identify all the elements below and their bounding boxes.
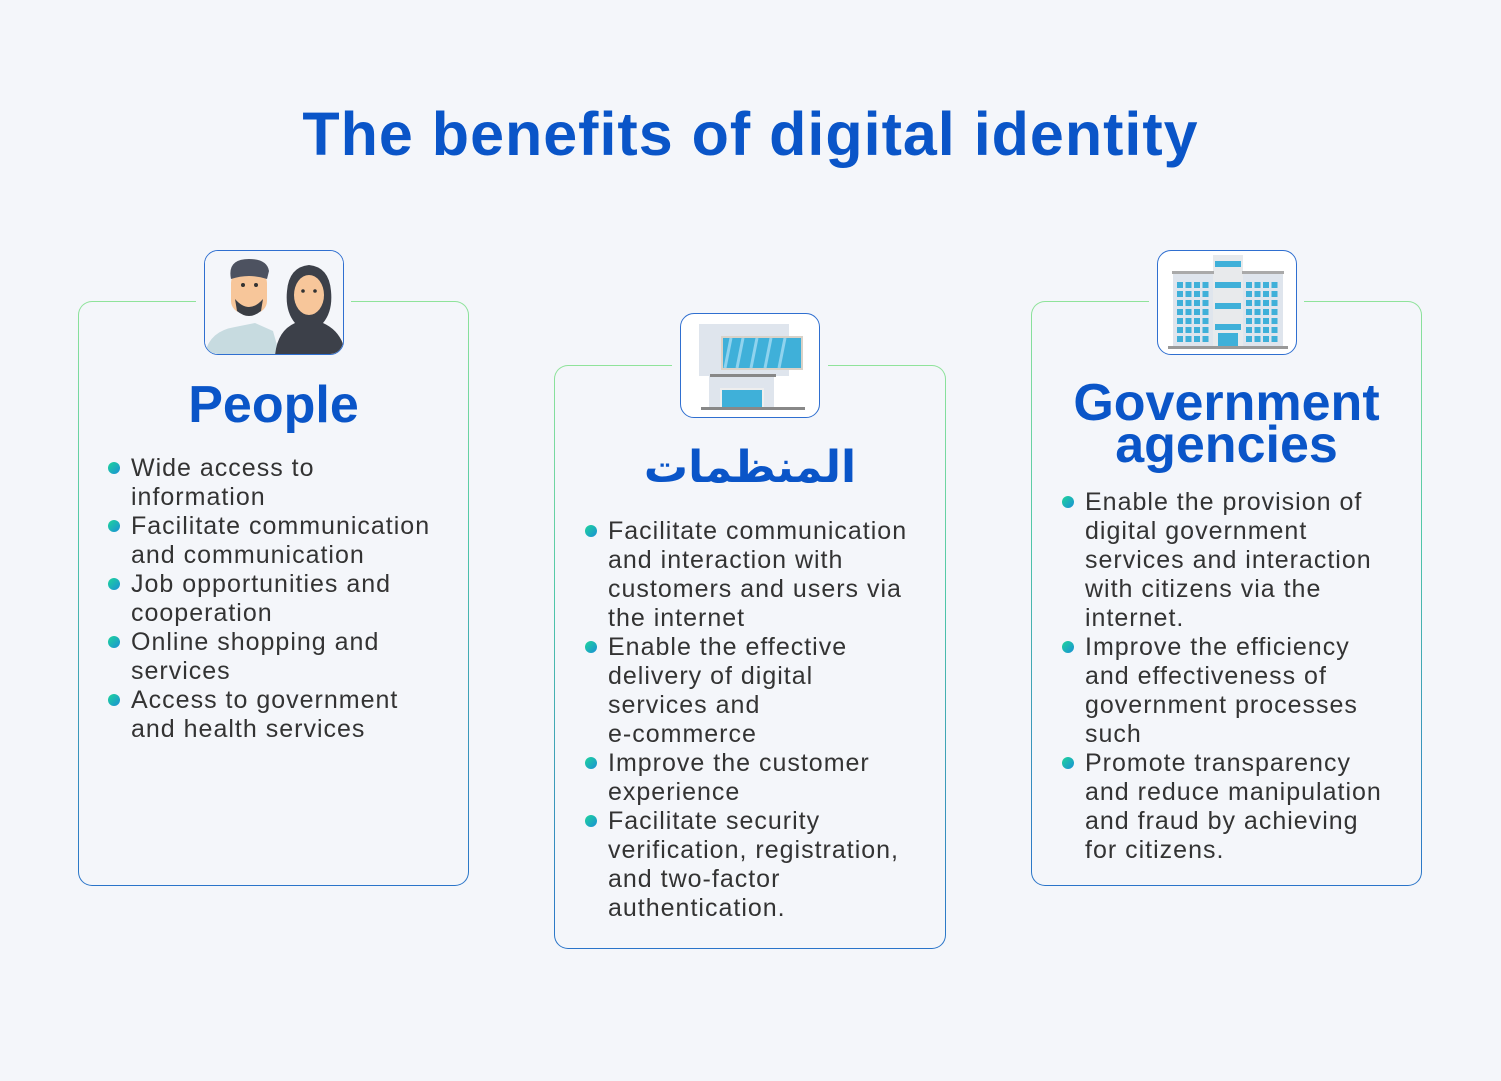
list: organizations: services and — [608, 691, 760, 719]
list: people: and communication — [131, 541, 365, 569]
list: organizations: e-commerce — [608, 720, 757, 748]
list: organizations: Facilitate communication — [608, 517, 907, 545]
list: organizations: Enable the effective — [608, 633, 847, 661]
list: organizations: the internet — [608, 604, 745, 632]
heading: People: People — [188, 376, 359, 434]
list: government: and fraud by achieving — [1085, 807, 1359, 835]
list: people: information — [131, 483, 266, 511]
list: organizations: authentication. — [608, 894, 786, 922]
list: organizations: verification, registration, — [608, 836, 899, 864]
heading: Government agencies — [1073, 374, 1380, 474]
list: people: and health services — [131, 715, 365, 743]
list: people: services — [131, 657, 231, 685]
panel: organizations — [554, 365, 946, 949]
list: people — [108, 454, 430, 743]
list: government: internet. — [1085, 604, 1184, 632]
list: government: services and interaction — [1085, 546, 1372, 574]
list: organizations: Improve the customer — [608, 749, 870, 777]
list: organizations: and interaction with — [608, 546, 843, 574]
list: government — [1062, 488, 1382, 864]
list: government: such — [1085, 720, 1142, 748]
list: government: Enable the provision of — [1085, 488, 1362, 516]
list: people: Wide access to — [131, 454, 315, 482]
list: government: Promote transparency — [1085, 749, 1351, 777]
list: people: Online shopping and — [131, 628, 379, 656]
list: people: Job opportunities and — [131, 570, 391, 598]
panel: government — [1031, 301, 1422, 886]
list: government: Improve the efficiency — [1085, 633, 1350, 661]
list: government: and reduce manipulation — [1085, 778, 1382, 806]
icon: government building — [1157, 250, 1297, 355]
list: government: and effectiveness of — [1085, 662, 1327, 690]
icon: store building — [680, 313, 820, 418]
list: organizations: and two-factor — [608, 865, 780, 893]
title: The benefits of digital identity — [302, 100, 1199, 168]
list: people: Access to government — [131, 686, 398, 714]
list: government: for citizens. — [1085, 836, 1224, 864]
panel: people — [78, 301, 469, 886]
list: organizations: Facilitate security — [608, 807, 820, 835]
list: government: digital government — [1085, 517, 1307, 545]
list: government: with citizens via the — [1085, 575, 1321, 603]
list: people: Facilitate communication — [131, 512, 430, 540]
list: people: cooperation — [131, 599, 273, 627]
list: government: government processes — [1085, 691, 1358, 719]
list: organizations: customers and users via — [608, 575, 902, 603]
heading: Government agencies: agencies — [1115, 416, 1338, 474]
heading: Arabic: المنظمات — [644, 442, 856, 493]
list: organizations — [585, 517, 907, 922]
heading: Government agencies: Government — [1073, 374, 1380, 432]
icon: people — [204, 250, 344, 355]
list: organizations: experience — [608, 778, 740, 806]
list: organizations: delivery of digital — [608, 662, 813, 690]
